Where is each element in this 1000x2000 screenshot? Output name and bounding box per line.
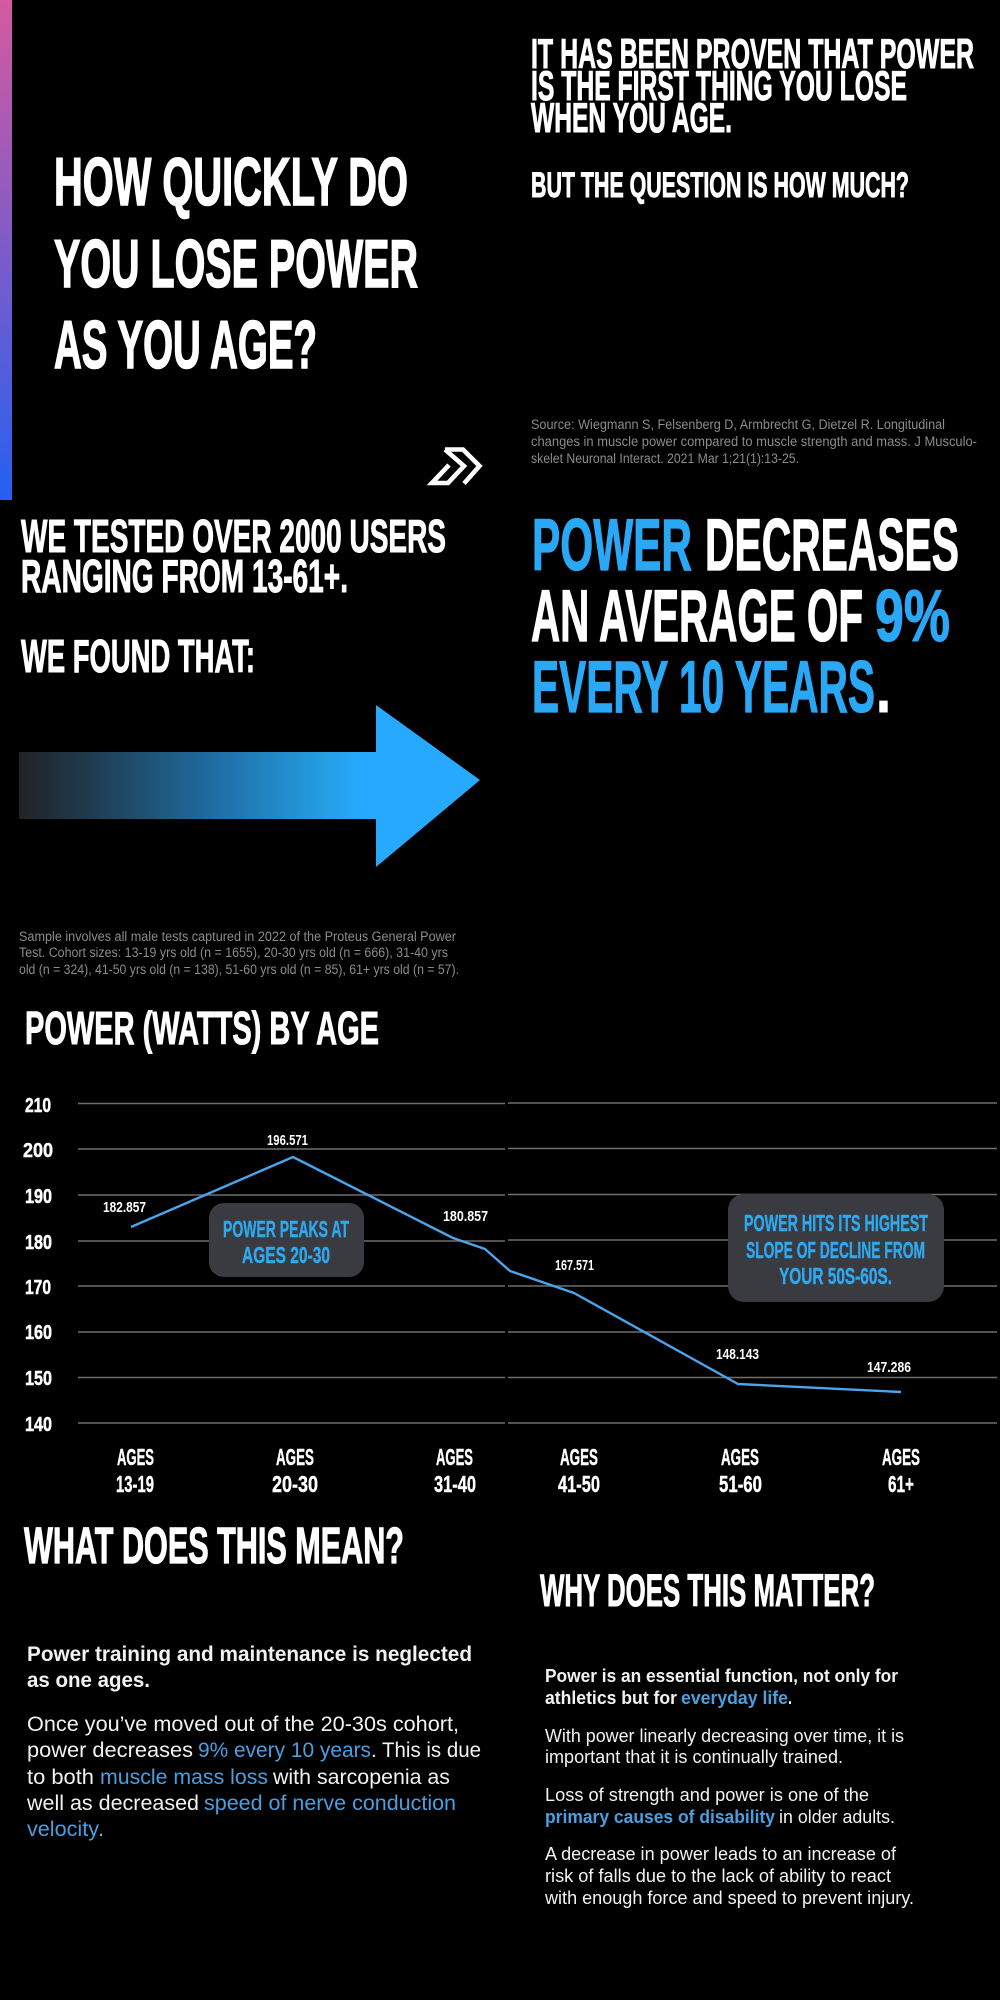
source citation: skelet Neuronal Interact. 2021 Mar 1;21(1):13-25. [531, 451, 799, 466]
y axis labels: 190 [25, 1186, 52, 1208]
x axis labels: AGES [436, 1444, 473, 1470]
key finding: 9% [875, 576, 950, 657]
chart heading: POWER (WATTS) BY AGE [25, 1002, 379, 1054]
icon: double chevron logo [432, 450, 480, 484]
title: AS YOU AGE? [54, 307, 317, 383]
panel: why does this matter text [544, 1666, 914, 1908]
x axis labels: 61+ [888, 1471, 914, 1497]
x axis labels: 31-40 [434, 1471, 476, 1497]
panel: why does this matter text: Power is an essential function, not only for [545, 1666, 898, 1686]
panel: what does this mean text: to both [27, 1766, 94, 1789]
test summary: RANGING FROM 13-61+. [21, 550, 348, 602]
panel: why does this matter text: With power linearly decreasing over time, it is [545, 1726, 904, 1746]
y axis labels: 140 [25, 1414, 52, 1436]
panel: what does this mean text: . This is due [371, 1739, 481, 1762]
callout: peak: AGES 20-30 [242, 1242, 330, 1268]
panel: why does this matter text: A decrease in power leads to an increase of [545, 1844, 897, 1864]
panel: what does this mean text: muscle mass loss [100, 1766, 268, 1789]
key finding: POWER [532, 505, 692, 586]
sample note: Test. Cohort sizes: 13-19 yrs old (n = 1655), 20-30 yrs old (n = 666), 31-40 yrs [19, 945, 448, 960]
title: HOW QUICKLY DO [54, 144, 408, 220]
panel: what does this mean text: velocity [27, 1818, 100, 1841]
sample note: Sample involves all male tests captured in 2022 of the Proteus General Power [19, 929, 456, 944]
panel: what does this mean text: speed of nerve conduction [204, 1792, 456, 1815]
y axis labels [23, 1095, 53, 1436]
panel: why does this matter text: Loss of strength and power is one of the [545, 1785, 869, 1805]
heading: what does this mean: WHAT DOES THIS MEAN? [24, 1517, 404, 1574]
panel: why does this matter text: primary causes of disability [545, 1807, 775, 1827]
test summary: WE FOUND THAT: [21, 630, 255, 682]
accent gradient bar [0, 0, 12, 500]
key finding: . [876, 647, 891, 728]
panel: what does this mean text [26, 1643, 481, 1841]
x axis labels: 13-19 [116, 1471, 154, 1497]
y axis labels: 150 [25, 1368, 52, 1390]
x axis labels [116, 1444, 920, 1497]
panel: why does this matter text: athletics but for [545, 1688, 677, 1708]
x axis labels: AGES [276, 1444, 314, 1470]
y axis labels: 200 [23, 1140, 53, 1162]
panel: why does this matter text: . [788, 1688, 792, 1708]
source citation [531, 417, 977, 466]
x axis labels: AGES [560, 1444, 598, 1470]
callout: steepest decline: YOUR 50S-60S. [779, 1263, 892, 1289]
x axis labels: AGES [117, 1444, 154, 1470]
y axis labels: 180 [25, 1232, 52, 1254]
panel: what does this mean text: Once you’ve moved out of the 20-30s cohort, [27, 1713, 459, 1736]
title: YOU LOSE POWER [54, 226, 418, 302]
panel: why does this matter text: risk of falls due to the lack of ability to react [545, 1866, 891, 1886]
data line [131, 1157, 901, 1392]
y axis labels: 170 [25, 1277, 51, 1299]
callout: steepest decline [728, 1194, 944, 1302]
source citation: Source: Wiegmann S, Felsenberg D, Armbrecht G, Dietzel R. Longitudinal [531, 417, 945, 432]
title [54, 144, 418, 383]
line chart: power by age [23, 1095, 997, 1497]
panel: why does this matter text: in older adults. [779, 1807, 895, 1827]
data value labels [103, 1133, 911, 1376]
panel: what does this mean text: . [99, 1818, 103, 1841]
sample note [19, 929, 459, 977]
sample note: old (n = 324), 41-50 yrs old (n = 138), 51-60 yrs old (n = 85), 61+ yrs old (n = 57). [19, 962, 459, 977]
data value labels: 196.571 [267, 1133, 308, 1149]
intro statement: WHEN YOU AGE. [531, 94, 732, 141]
data value labels: 147.286 [867, 1360, 911, 1376]
panel: what does this mean text: power decreases [27, 1739, 193, 1762]
panel: what does this mean text: 9% every 10 years [198, 1739, 371, 1762]
y axis labels: 160 [25, 1322, 52, 1344]
source citation: changes in muscle power compared to muscle strength and mass. J Musculo- [531, 434, 977, 449]
panel: why does this matter text: with enough force and speed to prevent injury. [544, 1888, 914, 1908]
data value labels: 180.857 [443, 1209, 488, 1225]
key finding [531, 505, 959, 728]
panel: what does this mean text: as one ages. [27, 1669, 150, 1692]
callout: peak: POWER PEAKS AT [223, 1216, 349, 1242]
intro statement [531, 30, 974, 205]
panel: what does this mean text: Power training and maintenance is neglected [27, 1643, 472, 1666]
y axis labels: 210 [25, 1095, 51, 1117]
x axis labels: 41-50 [558, 1471, 600, 1497]
arrow: gradient arrow pointing to finding [19, 705, 480, 867]
data value labels: 167.571 [555, 1258, 594, 1274]
x axis labels: AGES [882, 1444, 920, 1470]
x axis labels: AGES [721, 1444, 759, 1470]
test summary: WE TESTED OVER 2000 USERS [21, 510, 446, 562]
callout: peak [209, 1203, 364, 1277]
test summary [21, 510, 446, 682]
panel: what does this mean text: well as decreased [26, 1792, 199, 1815]
data value labels: 182.857 [103, 1200, 146, 1216]
x axis labels: 51-60 [719, 1471, 762, 1497]
panel: why does this matter text: important that it is continually trained. [545, 1747, 843, 1767]
panel: why does this matter text: everyday life [681, 1688, 788, 1708]
x axis labels: 20-30 [272, 1471, 318, 1497]
data value labels: 148.143 [716, 1347, 759, 1363]
panel: what does this mean text: with sarcopenia as [272, 1766, 450, 1789]
